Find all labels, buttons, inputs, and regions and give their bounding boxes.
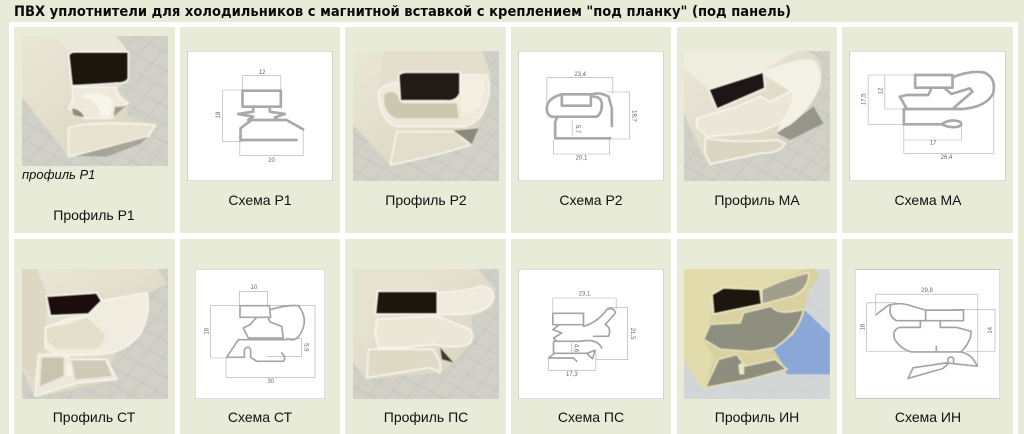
label: Профиль Р2: Профиль Р2 bbox=[385, 192, 467, 208]
diagram: схема ПС bbox=[518, 269, 664, 399]
label: Схема ПС: Схема ПС bbox=[558, 409, 624, 425]
photo: профиль Р1 bbox=[22, 36, 168, 166]
diagram: схема Р1: 20 bbox=[268, 158, 275, 164]
diagram: схема СТ bbox=[195, 269, 325, 399]
label: Профиль ПС: Профиль ПС bbox=[384, 409, 468, 425]
card: профиль Р2 bbox=[345, 27, 506, 233]
card: схема Р2 bbox=[511, 27, 671, 233]
diagram: схема МА: 17,5 bbox=[862, 93, 868, 105]
label: Схема Р2: Схема Р2 bbox=[559, 192, 623, 208]
photo: профиль ИН bbox=[684, 269, 830, 399]
diagram: схема СТ: 10 bbox=[251, 285, 258, 291]
label: Профиль Р1: Профиль Р1 bbox=[53, 207, 135, 223]
card: схема МА bbox=[842, 27, 1013, 233]
card: профиль Р1 bbox=[14, 27, 175, 233]
label: Профиль МА: Профиль МА bbox=[714, 192, 800, 208]
diagram: схема ИН: 16 bbox=[860, 323, 866, 330]
diagram: схема ИН: 14 bbox=[988, 326, 994, 334]
diagram: схема МА: 17 bbox=[930, 140, 937, 146]
diagram: схема Р1 bbox=[187, 51, 333, 181]
diagram: схема Р2 bbox=[518, 51, 664, 181]
card: схема Р1 bbox=[180, 27, 340, 233]
diagram: схема Р1: 18 bbox=[216, 111, 222, 118]
diagram: схема ПС: 17,3 bbox=[566, 372, 578, 378]
diagram: схема Р2: 20,1 bbox=[576, 155, 588, 161]
diagram: схема Р2: 23,4 bbox=[574, 72, 587, 78]
photo: профиль Р2 bbox=[353, 51, 499, 181]
diagram: схема ИН bbox=[855, 269, 1000, 399]
card: схема ИН bbox=[842, 239, 1013, 434]
photo: профиль ПС bbox=[353, 269, 499, 399]
diagram: схема СТ: 5,9 bbox=[302, 343, 308, 352]
photo: профиль СТ bbox=[22, 269, 168, 399]
diagram: схема ПС: 23,1 bbox=[579, 292, 591, 298]
title: ПВХ уплотнители для холодильников с магнитной вставкой с креплением "под планку" (под панель) bbox=[14, 4, 791, 20]
diagram: схема МА: 26,4 bbox=[941, 155, 953, 161]
photo: профиль МА bbox=[684, 51, 830, 181]
diagram: схема СТ: 30 bbox=[267, 379, 275, 385]
caption: профиль Р1 italic: профиль Р1 bbox=[22, 167, 95, 182]
card: профиль ИН bbox=[677, 239, 837, 434]
label: Профиль СТ: Профиль СТ bbox=[53, 409, 136, 425]
diagram: схема Р2: 18,7 bbox=[631, 110, 637, 122]
card: схема ПС bbox=[511, 239, 671, 434]
card: профиль ПС bbox=[345, 239, 506, 434]
diagram: схема ПС: 4,6 bbox=[572, 344, 578, 353]
diagram: схема Р2: 5,7 bbox=[574, 125, 580, 134]
label: Профиль ИН: Профиль ИН bbox=[715, 409, 799, 425]
card: схема СТ bbox=[180, 239, 340, 434]
diagram: схема Р1: 12 bbox=[259, 70, 266, 76]
card: профиль СТ bbox=[14, 239, 175, 434]
diagram: схема ИН: 29,8 bbox=[921, 288, 933, 294]
diagram: схема СТ: 18 bbox=[205, 327, 211, 335]
label: Схема МА: Схема МА bbox=[894, 192, 962, 208]
label: Схема ИН: Схема ИН bbox=[895, 409, 961, 425]
card: профиль МА bbox=[677, 27, 837, 233]
diagram: схема МА: 12 bbox=[878, 87, 884, 94]
label: Схема СТ: Схема СТ bbox=[228, 409, 293, 425]
diagram: схема ПС: 21,5 bbox=[629, 328, 635, 340]
diagram: схема МА bbox=[849, 51, 1006, 181]
label: Схема Р1: Схема Р1 bbox=[228, 192, 292, 208]
